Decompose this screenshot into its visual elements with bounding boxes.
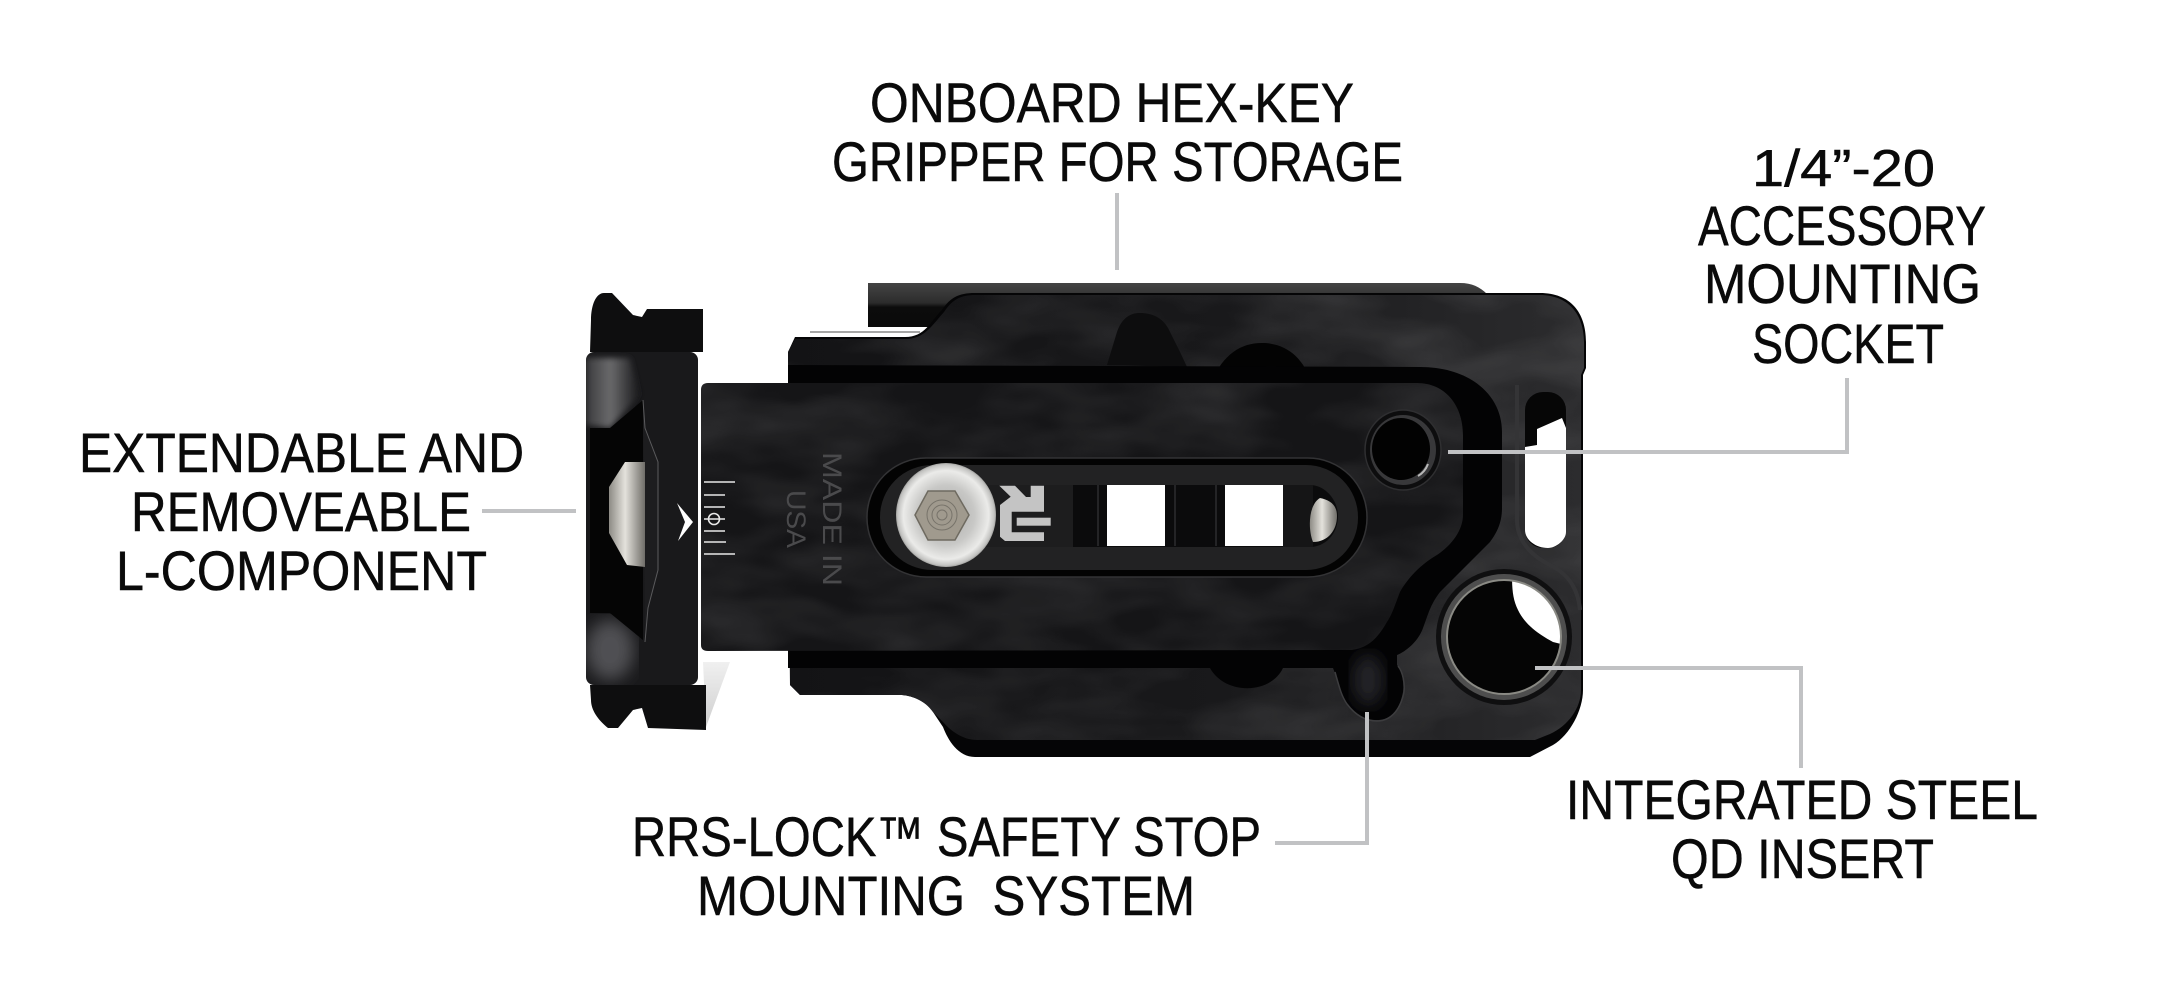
leader: hex-key gripper — [1115, 193, 1119, 270]
windows through the slot — [1098, 485, 1313, 547]
long adjustment slot — [867, 458, 1367, 577]
contour strip — [643, 400, 658, 642]
engraved text: made in USA: MADE IN — [817, 452, 847, 586]
label: accessory socket: MOUNTING — [1704, 252, 1981, 315]
sliding L-component plate — [701, 383, 1463, 651]
L-component head — [586, 293, 706, 730]
engraved scale marks — [704, 482, 735, 554]
logo backing — [985, 485, 1073, 547]
bottom clamp ear — [590, 685, 706, 730]
upper notch — [1107, 313, 1187, 367]
label: QD insert: INTEGRATED STEEL — [1566, 768, 2038, 831]
label: L-component: REMOVEABLE — [131, 480, 471, 543]
head body — [586, 352, 698, 685]
socket head screw — [896, 463, 996, 567]
side slot — [1525, 392, 1566, 548]
label: L-component — [79, 421, 524, 602]
RU logo — [999, 486, 1051, 541]
label: accessory socket: SOCKET — [1752, 312, 1944, 375]
lower highlight — [586, 620, 634, 680]
leader: accessory socket — [1448, 378, 1847, 452]
1/4-20 accessory socket — [1365, 410, 1441, 490]
top clamp ear — [590, 293, 703, 352]
label: L-component: EXTENDABLE AND — [79, 421, 524, 484]
engraved text: made in USA — [781, 452, 847, 586]
frame around the side slot — [1517, 385, 1580, 610]
product photo: extendable L-plate — [586, 283, 1586, 757]
leader: L-component — [482, 509, 576, 513]
callout leaders — [482, 193, 1847, 843]
main base plate — [788, 293, 1586, 757]
label: QD insert: QD INSERT — [1671, 827, 1934, 890]
label: safety stop — [632, 805, 1261, 927]
leader: QD insert — [1535, 668, 1801, 768]
rear silver screw — [1310, 498, 1337, 542]
RRS-Lock safety stop keyhole — [1335, 654, 1404, 721]
integrated steel QD insert — [1436, 569, 1572, 705]
recess — [590, 400, 643, 640]
upper round cut-out — [1210, 343, 1312, 385]
label: safety stop: RRS-LOCK™ SAFETY STOP — [632, 805, 1261, 868]
black channel around the slider — [788, 365, 1502, 720]
label: QD insert — [1566, 768, 2038, 890]
upper highlight — [586, 358, 640, 428]
white chevron — [677, 503, 693, 541]
rear top rail — [810, 283, 1487, 332]
label: accessory socket: 1/4”-20 — [1752, 140, 1935, 198]
infographic canvas — [82, 82, 2037, 916]
label: hex-key gripper — [832, 71, 1403, 193]
label: accessory socket — [1698, 140, 1986, 375]
label: safety stop: MOUNTING SYSTEM — [697, 864, 1195, 927]
engraved text: made in USA: USA — [781, 490, 811, 548]
label: hex-key gripper: ONBOARD HEX-KEY — [870, 71, 1354, 134]
label: accessory socket: ACCESSORY — [1698, 194, 1986, 257]
leader: safety stop — [1275, 712, 1367, 843]
label: L-component: L-COMPONENT — [116, 539, 487, 602]
light shadow under the L-component — [703, 662, 730, 727]
label: hex-key gripper: GRIPPER FOR STORAGE — [832, 130, 1403, 193]
silver clamp screw — [609, 462, 645, 567]
